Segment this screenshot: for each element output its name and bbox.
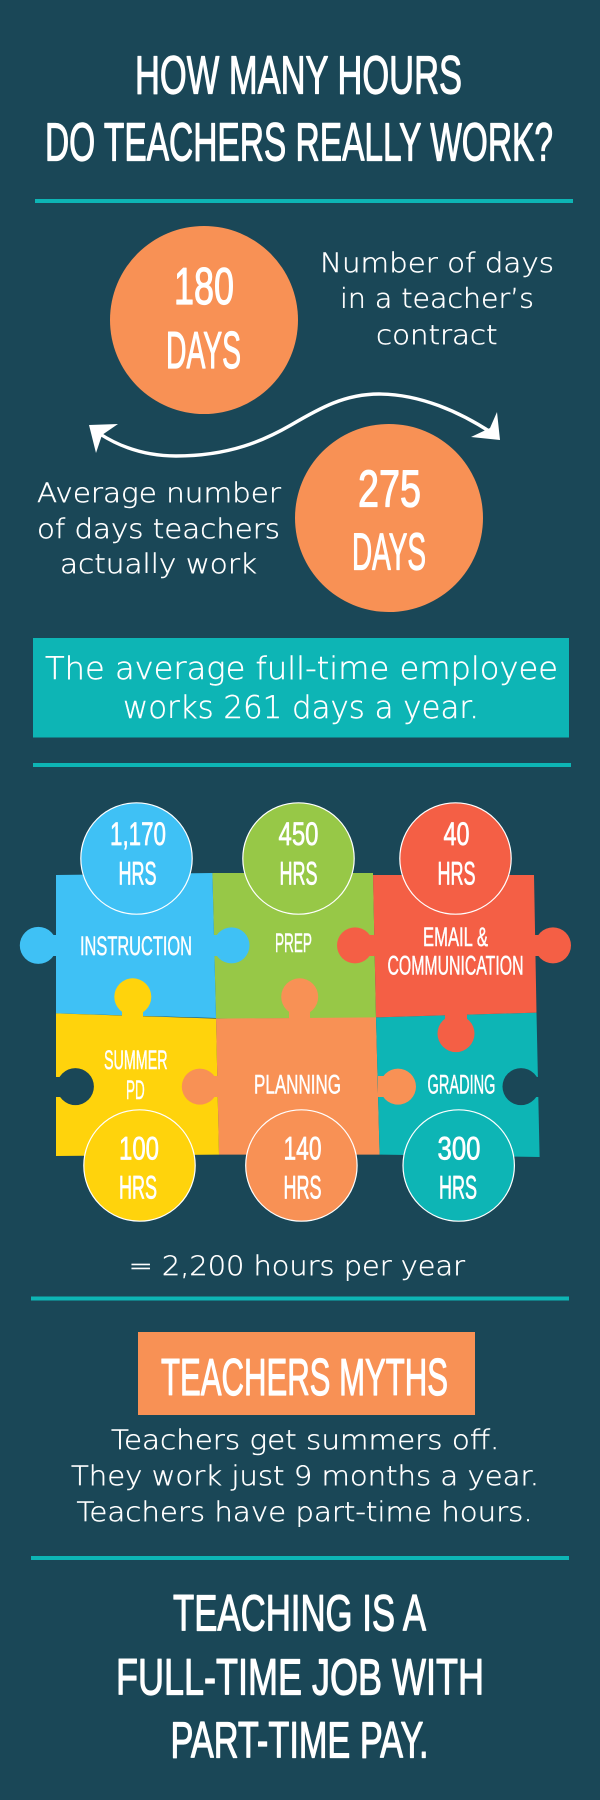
puzzle piece: grading xyxy=(376,1013,540,1157)
badge: 300 hrs: 300 xyxy=(438,1130,480,1166)
puzzle piece: planning xyxy=(216,1017,380,1155)
title xyxy=(45,46,553,172)
circle: 275 days xyxy=(295,424,483,612)
closing statement xyxy=(116,1584,484,1768)
label: planning: PLANNING xyxy=(254,1070,341,1100)
badge: 450 hrs xyxy=(243,803,354,914)
text: average days actually worked: of days teachers xyxy=(37,514,280,545)
circle: 180 days: DAYS xyxy=(166,322,241,380)
puzzle piece: instruction xyxy=(20,873,249,1018)
callout: 261 days: works 261 days a year. xyxy=(123,690,479,726)
text: average days actually worked: Average number xyxy=(37,478,281,509)
circle: 180 days: 180 xyxy=(174,258,234,316)
puzzle piece: prep xyxy=(212,873,376,1019)
badge: 1,170 hrs: HRS xyxy=(118,856,156,892)
badge: 450 hrs: 450 xyxy=(278,816,318,852)
label: email and communication xyxy=(388,922,524,981)
badge: 100 hrs: 100 xyxy=(119,1130,159,1166)
badge: 140 hrs xyxy=(246,1110,357,1221)
label: summer PD: SUMMER xyxy=(104,1045,168,1075)
text: myths list: They work just 9 months a year. xyxy=(71,1461,539,1492)
text: myths list: Teachers have part-time hours. xyxy=(76,1497,533,1528)
label: prep: PREP xyxy=(275,928,312,958)
circle: 275 days: DAYS xyxy=(352,524,426,582)
text: number of days in contract: contract xyxy=(376,320,498,351)
closing statement: PART-TIME PAY. xyxy=(170,1712,428,1768)
text: number of days in contract: in a teacher’s xyxy=(340,284,534,315)
hole: right of grading xyxy=(502,1068,542,1105)
badge: 40 hrs: 40 xyxy=(444,816,470,852)
label: email and communication: EMAIL & xyxy=(423,922,488,952)
callout: 261 days: The average full-time employee xyxy=(45,651,558,687)
text: total hours: = 2,200 hours per year xyxy=(129,1251,466,1282)
badge: 1,170 hrs: 1,170 xyxy=(110,816,166,852)
text: number of days in contract xyxy=(320,248,554,351)
badge: 300 hrs xyxy=(403,1110,514,1221)
badge: 40 hrs: HRS xyxy=(438,856,476,892)
badge: 140 hrs: 140 xyxy=(284,1130,322,1166)
text: myths list xyxy=(71,1425,539,1528)
puzzle piece: email and communication xyxy=(337,875,571,1052)
arrow: double-headed curve xyxy=(89,394,500,456)
badge: 100 hrs: HRS xyxy=(119,1170,157,1206)
puzzle chart xyxy=(20,803,571,1221)
badge: 300 hrs: HRS xyxy=(439,1170,477,1206)
puzzle piece: summer PD xyxy=(56,978,219,1156)
label: summer PD: PD xyxy=(126,1075,145,1105)
text: average days actually worked: actually work xyxy=(60,549,257,580)
label: grading: GRADING xyxy=(428,1070,496,1100)
heading: teachers myths xyxy=(138,1332,475,1415)
badge: 1,170 hrs xyxy=(81,803,192,914)
badge: 40 hrs xyxy=(400,803,511,914)
label: summer PD xyxy=(104,1045,168,1105)
text: number of days in contract: Number of days xyxy=(320,248,554,279)
circle: 180 days xyxy=(110,226,298,414)
hole: left of summer PD xyxy=(54,1068,94,1105)
closing statement: TEACHING IS A xyxy=(173,1584,426,1642)
text: average days actually worked xyxy=(37,478,281,580)
text: myths list: Teachers get summers off. xyxy=(111,1425,499,1456)
badge: 100 hrs xyxy=(84,1110,195,1221)
badge: 450 hrs: HRS xyxy=(280,856,318,892)
circle: 275 days: 275 xyxy=(358,460,421,518)
callout: 261 days xyxy=(33,638,569,738)
knob: orange into yellow and up xyxy=(182,978,416,1105)
label: instruction: INSTRUCTION xyxy=(80,931,192,961)
badge: 140 hrs: HRS xyxy=(284,1170,322,1206)
